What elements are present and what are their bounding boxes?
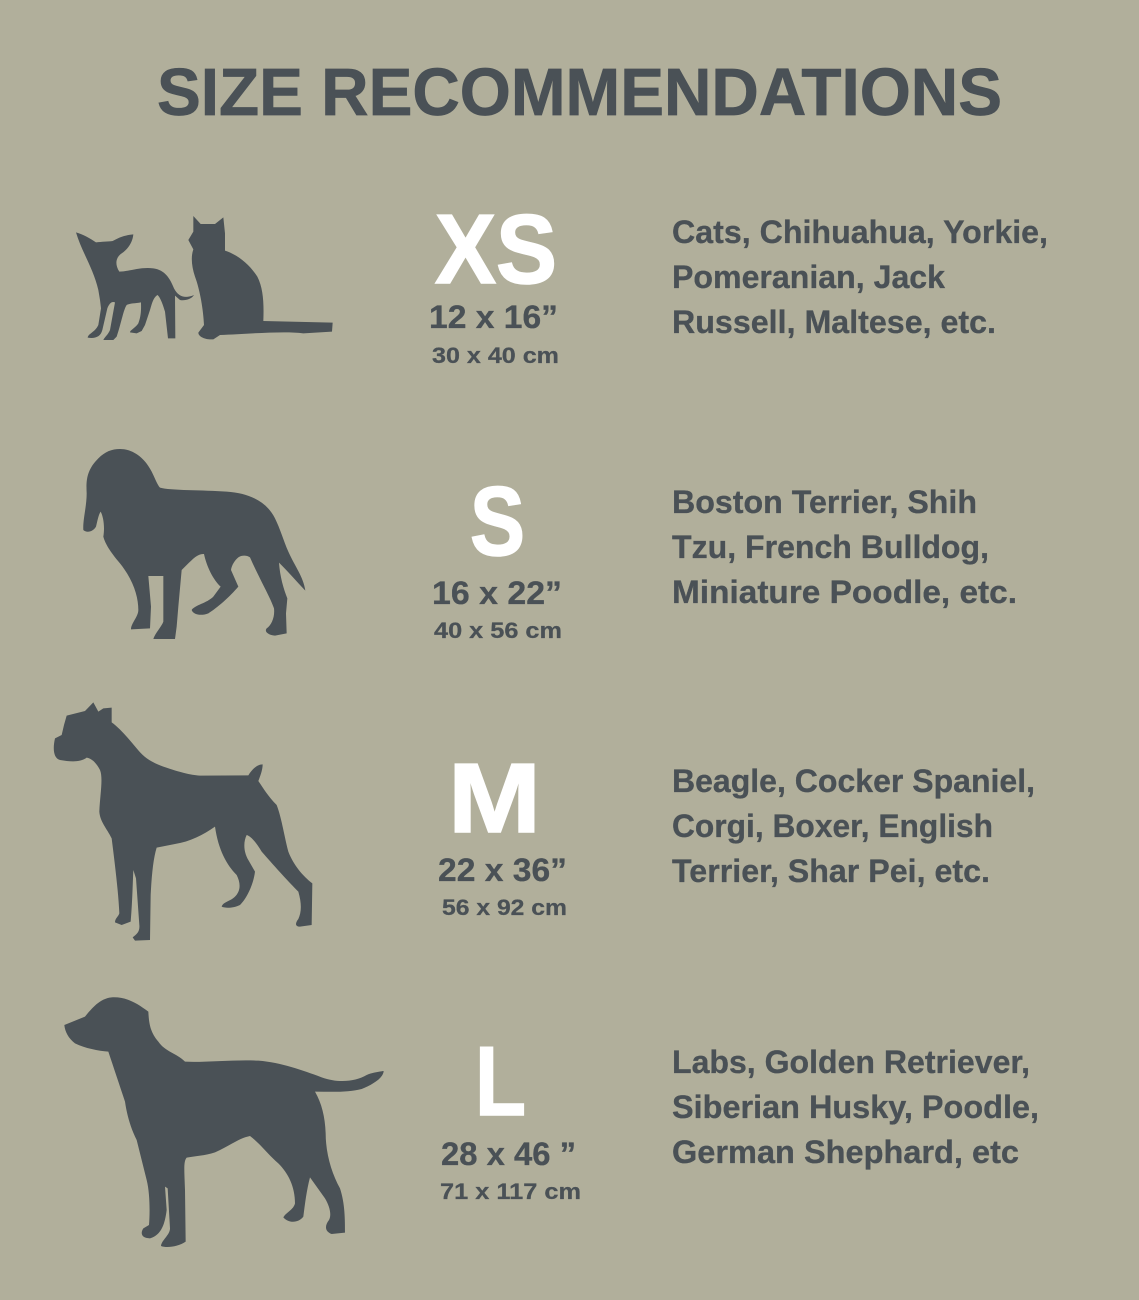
- dimensions in inches S: 16 x 22”: [432, 575, 562, 611]
- breed list S: [672, 484, 1017, 610]
- size label M: M: [448, 743, 541, 853]
- breed list L: German Shephard, etc: [672, 1134, 1019, 1170]
- breed list XS: Russell, Maltese, etc.: [672, 304, 996, 340]
- dimensions in inches L: 28 x 46 ”: [441, 1136, 576, 1172]
- breed list S: Tzu, French Bulldog,: [672, 529, 989, 565]
- breed list XS: Pomeranian, Jack: [672, 259, 945, 295]
- title: SIZE RECOMMENDATIONS: [157, 55, 1002, 130]
- breed list XS: Cats, Chihuahua, Yorkie,: [672, 214, 1048, 250]
- breed list M: Corgi, Boxer, English: [672, 808, 993, 844]
- dimensions in cm S: 40 x 56 cm: [434, 618, 562, 643]
- dimensions in cm XS: 30 x 40 cm: [432, 343, 559, 368]
- dimensions in inches XS: 12 x 16”: [429, 299, 558, 335]
- icon: labrador silhouette: [64, 997, 384, 1247]
- size label L: L: [475, 1026, 526, 1136]
- breed list L: Labs, Golden Retriever,: [672, 1044, 1030, 1080]
- breed list M: [672, 763, 1035, 889]
- panel: XS size row: [76, 194, 1048, 368]
- icon: small dog silhouette: [83, 449, 305, 639]
- dimensions in cm L: 71 x 117 cm: [440, 1179, 581, 1204]
- panel: L size row: [64, 997, 1039, 1247]
- dimensions in inches M: 22 x 36”: [438, 852, 567, 888]
- breed list S: Boston Terrier, Shih: [672, 484, 977, 520]
- panel: M size row: [54, 702, 1035, 941]
- size label S: S: [470, 466, 525, 576]
- size label XS: XS: [435, 194, 557, 304]
- breed list M: Beagle, Cocker Spaniel,: [672, 763, 1035, 799]
- breed list L: Siberian Husky, Poodle,: [672, 1089, 1039, 1125]
- breed list S: Miniature Poodle, etc.: [672, 574, 1017, 610]
- breed list XS: [672, 214, 1048, 340]
- panel: S size row: [83, 449, 1017, 643]
- breed list M: Terrier, Shar Pei, etc.: [672, 853, 990, 889]
- breed list L: [672, 1044, 1039, 1170]
- icon: boxer silhouette: [54, 702, 312, 941]
- icon: chihuahua and cat silhouettes: [76, 216, 333, 340]
- dimensions in cm M: 56 x 92 cm: [442, 895, 567, 920]
